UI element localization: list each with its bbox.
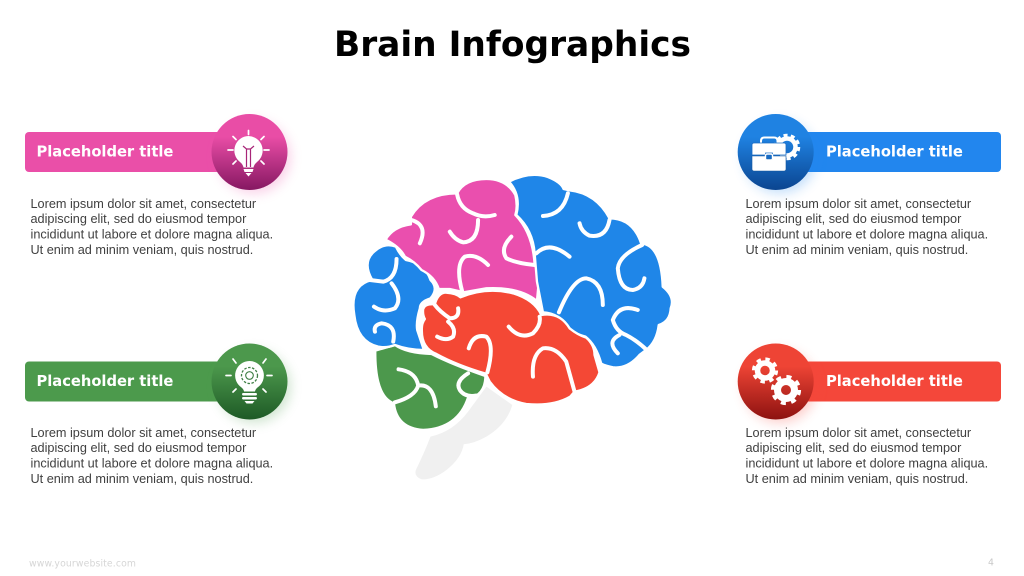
text block: incididunt ut labore et dolore magna aliqua. bbox=[30, 456, 273, 470]
title bar: blue: Placeholder title bbox=[826, 144, 963, 160]
title bar: green: Placeholder title bbox=[36, 373, 173, 390]
brain stem bbox=[415, 387, 512, 479]
text block: incididunt ut labore et dolore magna aliqua. bbox=[30, 228, 273, 242]
brain illustration bbox=[353, 175, 672, 479]
text block: adipiscing elit, sed do eiusmod tempor bbox=[746, 441, 962, 455]
text block: Lorem ipsum dolor sit amet, consectetur bbox=[746, 426, 972, 440]
title bar: green bbox=[25, 362, 240, 402]
text block: Lorem ipsum dolor sit amet, consectetur bbox=[30, 197, 257, 211]
panel: blue top-right bbox=[738, 114, 1001, 257]
text block: incididunt ut labore et dolore magna aliqua. bbox=[746, 228, 988, 242]
text block: Ut enim ad minim veniam, quis nostrud. bbox=[746, 243, 968, 257]
text block: Lorem ipsum dolor sit amet, consectetur bbox=[30, 426, 257, 440]
text block: Lorem ipsum dolor sit amet, consectetur bbox=[746, 197, 972, 211]
title bar: pink: Placeholder title bbox=[36, 144, 173, 160]
icon: light bulb bbox=[212, 114, 290, 193]
text block bbox=[30, 197, 273, 257]
text block: incididunt ut labore et dolore magna aliqua. bbox=[746, 456, 988, 470]
text block bbox=[746, 426, 988, 486]
title: Brain Infographics bbox=[334, 25, 691, 65]
text block: Ut enim ad minim veniam, quis nostrud. bbox=[746, 472, 968, 486]
text block bbox=[30, 426, 273, 486]
lobe: green bbox=[375, 345, 485, 430]
text block: adipiscing elit, sed do eiusmod tempor bbox=[746, 212, 962, 226]
text block: Ut enim ad minim veniam, quis nostrud. bbox=[30, 472, 253, 486]
title bar: red bbox=[786, 362, 1001, 402]
icon: briefcase and gear bbox=[738, 114, 816, 193]
icon: two gears bbox=[738, 344, 816, 422]
title bar: pink bbox=[25, 132, 240, 172]
text block bbox=[746, 197, 988, 257]
text block: adipiscing elit, sed do eiusmod tempor bbox=[30, 212, 247, 226]
text block: adipiscing elit, sed do eiusmod tempor bbox=[30, 441, 247, 455]
footer: page number: 4 bbox=[988, 558, 994, 568]
panel: green bottom-left bbox=[25, 344, 290, 486]
lobe: blue right bbox=[509, 175, 672, 367]
panel: red bottom-right bbox=[738, 344, 1001, 486]
footer: website: www.yourwebsite.com bbox=[29, 558, 136, 570]
lobe: red bbox=[422, 291, 600, 405]
title bar: blue bbox=[786, 132, 1001, 172]
text block: Ut enim ad minim veniam, quis nostrud. bbox=[30, 243, 253, 257]
lobe: blue left bbox=[353, 245, 435, 350]
panel: pink top-left bbox=[25, 114, 290, 257]
title bar: red: Placeholder title bbox=[826, 373, 963, 390]
lobe: pink bbox=[386, 179, 539, 301]
icon: bulb with gear bbox=[212, 344, 290, 422]
